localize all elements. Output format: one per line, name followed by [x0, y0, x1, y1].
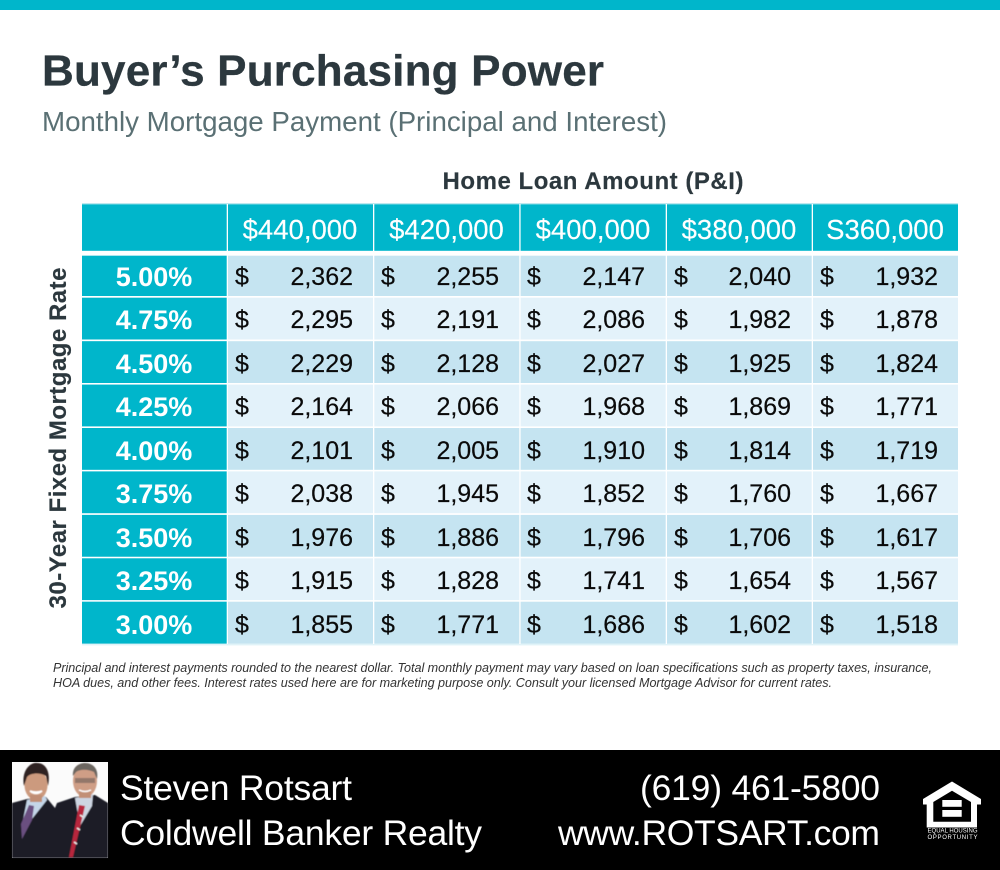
- row axis heading: 30-Year Fixed Mortgage Rate: [45, 268, 72, 608]
- row 4.25%: 2,164: [290, 393, 353, 421]
- row 3.25%: $: [820, 567, 834, 595]
- table header row: [82, 204, 958, 251]
- row 3.50%: $: [674, 524, 688, 552]
- mortgage payment table: [82, 203, 958, 645]
- row 3.50%: $: [381, 524, 395, 552]
- row 3.75%: $: [674, 480, 688, 508]
- row 4.25%: 1,869: [728, 393, 791, 421]
- row 5.00%: $: [527, 263, 541, 291]
- row 3.75%: $: [820, 480, 834, 508]
- disclaimer: HOA dues, and other fees. Interest rates used here are for marketing purpose only. Consult your licensed Mortgage Advisor for current rates.: [53, 676, 832, 690]
- row 4.00%: $: [381, 437, 395, 465]
- row 4.50%: 1,925: [728, 350, 791, 378]
- icon: equal housing opportunity: [923, 782, 981, 841]
- row 5.00%: $: [674, 263, 688, 291]
- table header row: S360,000: [826, 214, 944, 245]
- website: www.ROTSART.com: [557, 813, 880, 853]
- row 3.25%: [82, 558, 958, 600]
- icon: equal housing opportunity: EQUAL HOUSING: [928, 829, 978, 835]
- table header row: $440,000: [243, 214, 357, 245]
- row 4.50%: 2,027: [582, 350, 645, 378]
- disclaimer: [53, 661, 932, 690]
- row 3.75%: 3.75%: [116, 479, 192, 509]
- row 4.75%: $: [381, 306, 395, 334]
- row 4.75%: $: [674, 306, 688, 334]
- row 3.50%: $: [820, 524, 834, 552]
- row 4.75%: 2,295: [290, 306, 353, 334]
- row 3.50%: 1,796: [582, 524, 645, 552]
- row 3.50%: [82, 515, 958, 557]
- row 5.00%: 2,255: [436, 263, 499, 291]
- row 3.50%: $: [235, 524, 249, 552]
- row 3.75%: $: [381, 480, 395, 508]
- row 3.00%: $: [820, 611, 834, 639]
- row 4.25%: $: [381, 393, 395, 421]
- row 3.00%: $: [527, 611, 541, 639]
- row 3.25%: $: [235, 567, 249, 595]
- row 4.50%: 1,824: [875, 350, 938, 378]
- row 3.25%: 3.25%: [116, 566, 192, 596]
- row 4.75%: 2,191: [436, 306, 499, 334]
- row 5.00%: 1,932: [875, 263, 938, 291]
- row 4.75%: [82, 298, 958, 340]
- row 4.25%: [82, 385, 958, 426]
- icon: equal housing opportunity: OPPORTUNITY: [928, 835, 978, 841]
- table header row: $400,000: [536, 214, 650, 245]
- row 5.00%: $: [820, 263, 834, 291]
- agent photo: [12, 762, 108, 858]
- table header row: $380,000: [682, 214, 796, 245]
- row 4.00%: $: [235, 437, 249, 465]
- row 4.00%: 2,101: [290, 437, 353, 465]
- row 4.50%: [82, 341, 958, 383]
- row 3.75%: $: [527, 480, 541, 508]
- row 4.25%: $: [527, 393, 541, 421]
- row 4.50%: 4.50%: [116, 349, 192, 379]
- row 3.75%: [82, 471, 958, 513]
- row 3.00%: $: [381, 611, 395, 639]
- agent name: Steven Rotsart: [120, 768, 352, 808]
- row 4.75%: 1,982: [728, 306, 791, 334]
- row 3.00%: $: [235, 611, 249, 639]
- row 4.25%: $: [820, 393, 834, 421]
- row 3.00%: 1,771: [436, 611, 499, 639]
- row 4.50%: $: [381, 350, 395, 378]
- row 4.00%: $: [674, 437, 688, 465]
- row 3.75%: 1,945: [436, 480, 499, 508]
- row 4.00%: 1,910: [582, 437, 645, 465]
- subtitle: Monthly Mortgage Payment (Principal and Interest): [42, 106, 667, 137]
- row 4.00%: 1,814: [728, 437, 791, 465]
- row 4.00%: 2,005: [436, 437, 499, 465]
- row 5.00%: $: [381, 263, 395, 291]
- top accent bar: [0, 0, 1000, 10]
- row 4.00%: [82, 428, 958, 470]
- row 4.50%: $: [674, 350, 688, 378]
- row 3.50%: 1,617: [875, 524, 938, 552]
- row 4.25%: 1,771: [875, 393, 938, 421]
- row 3.50%: 1,886: [436, 524, 499, 552]
- row 4.00%: $: [527, 437, 541, 465]
- row 4.75%: 2,086: [582, 306, 645, 334]
- row 3.25%: 1,741: [582, 567, 645, 595]
- row 3.75%: 1,667: [875, 480, 938, 508]
- row 3.25%: 1,915: [290, 567, 353, 595]
- row 5.00%: 2,040: [728, 263, 791, 291]
- row 4.75%: 4.75%: [116, 305, 192, 335]
- row 5.00%: $: [235, 263, 249, 291]
- brokerage name: Coldwell Banker Realty: [120, 813, 482, 853]
- column axis heading: Home Loan Amount (P&I): [442, 168, 744, 195]
- row 3.75%: 1,852: [582, 480, 645, 508]
- row 3.50%: $: [527, 524, 541, 552]
- row 3.50%: 3.50%: [116, 523, 192, 553]
- row 3.25%: 1,567: [875, 567, 938, 595]
- row 4.25%: 2,066: [436, 393, 499, 421]
- row 3.25%: $: [381, 567, 395, 595]
- row 3.00%: 1,602: [728, 611, 791, 639]
- row 3.25%: $: [674, 567, 688, 595]
- row 5.00%: 2,147: [582, 263, 645, 291]
- row 4.75%: 1,878: [875, 306, 938, 334]
- row 4.75%: $: [820, 306, 834, 334]
- row 4.25%: $: [674, 393, 688, 421]
- row 4.25%: 1,968: [582, 393, 645, 421]
- row 5.00%: 5.00%: [116, 262, 192, 292]
- row 3.00%: [82, 602, 958, 644]
- row 3.00%: 1,518: [875, 611, 938, 639]
- table header row: $420,000: [389, 214, 504, 245]
- row 4.50%: 2,229: [290, 350, 353, 378]
- disclaimer: Principal and interest payments rounded to the nearest dollar. Total monthly payment may vary based on loan specifications such as property taxes, insurance,: [53, 661, 932, 675]
- row 4.00%: 4.00%: [116, 436, 192, 466]
- row 4.50%: $: [527, 350, 541, 378]
- row 4.25%: $: [235, 393, 249, 421]
- row 4.00%: $: [820, 437, 834, 465]
- row 4.50%: 2,128: [436, 350, 499, 378]
- row 3.75%: 2,038: [290, 480, 353, 508]
- row 3.25%: 1,828: [436, 567, 499, 595]
- row 3.00%: 1,686: [582, 611, 645, 639]
- title: Buyer’s Purchasing Power: [42, 46, 604, 96]
- row 3.00%: 3.00%: [116, 610, 192, 640]
- row 4.75%: $: [235, 306, 249, 334]
- row 5.00%: [82, 256, 958, 296]
- row 3.25%: $: [527, 567, 541, 595]
- row 3.50%: 1,706: [728, 524, 791, 552]
- row 5.00%: 2,362: [290, 263, 353, 291]
- row 3.50%: 1,976: [290, 524, 353, 552]
- row 4.00%: 1,719: [875, 437, 938, 465]
- phone number: (619) 461-5800: [640, 768, 880, 808]
- row 3.25%: 1,654: [728, 567, 791, 595]
- row 4.25%: 4.25%: [116, 392, 192, 422]
- row 4.75%: $: [527, 306, 541, 334]
- row 3.75%: 1,760: [728, 480, 791, 508]
- row 3.00%: $: [674, 611, 688, 639]
- row 3.00%: 1,855: [290, 611, 353, 639]
- row 4.50%: $: [235, 350, 249, 378]
- footer band: [0, 750, 1000, 870]
- row 3.75%: $: [235, 480, 249, 508]
- row 4.50%: $: [820, 350, 834, 378]
